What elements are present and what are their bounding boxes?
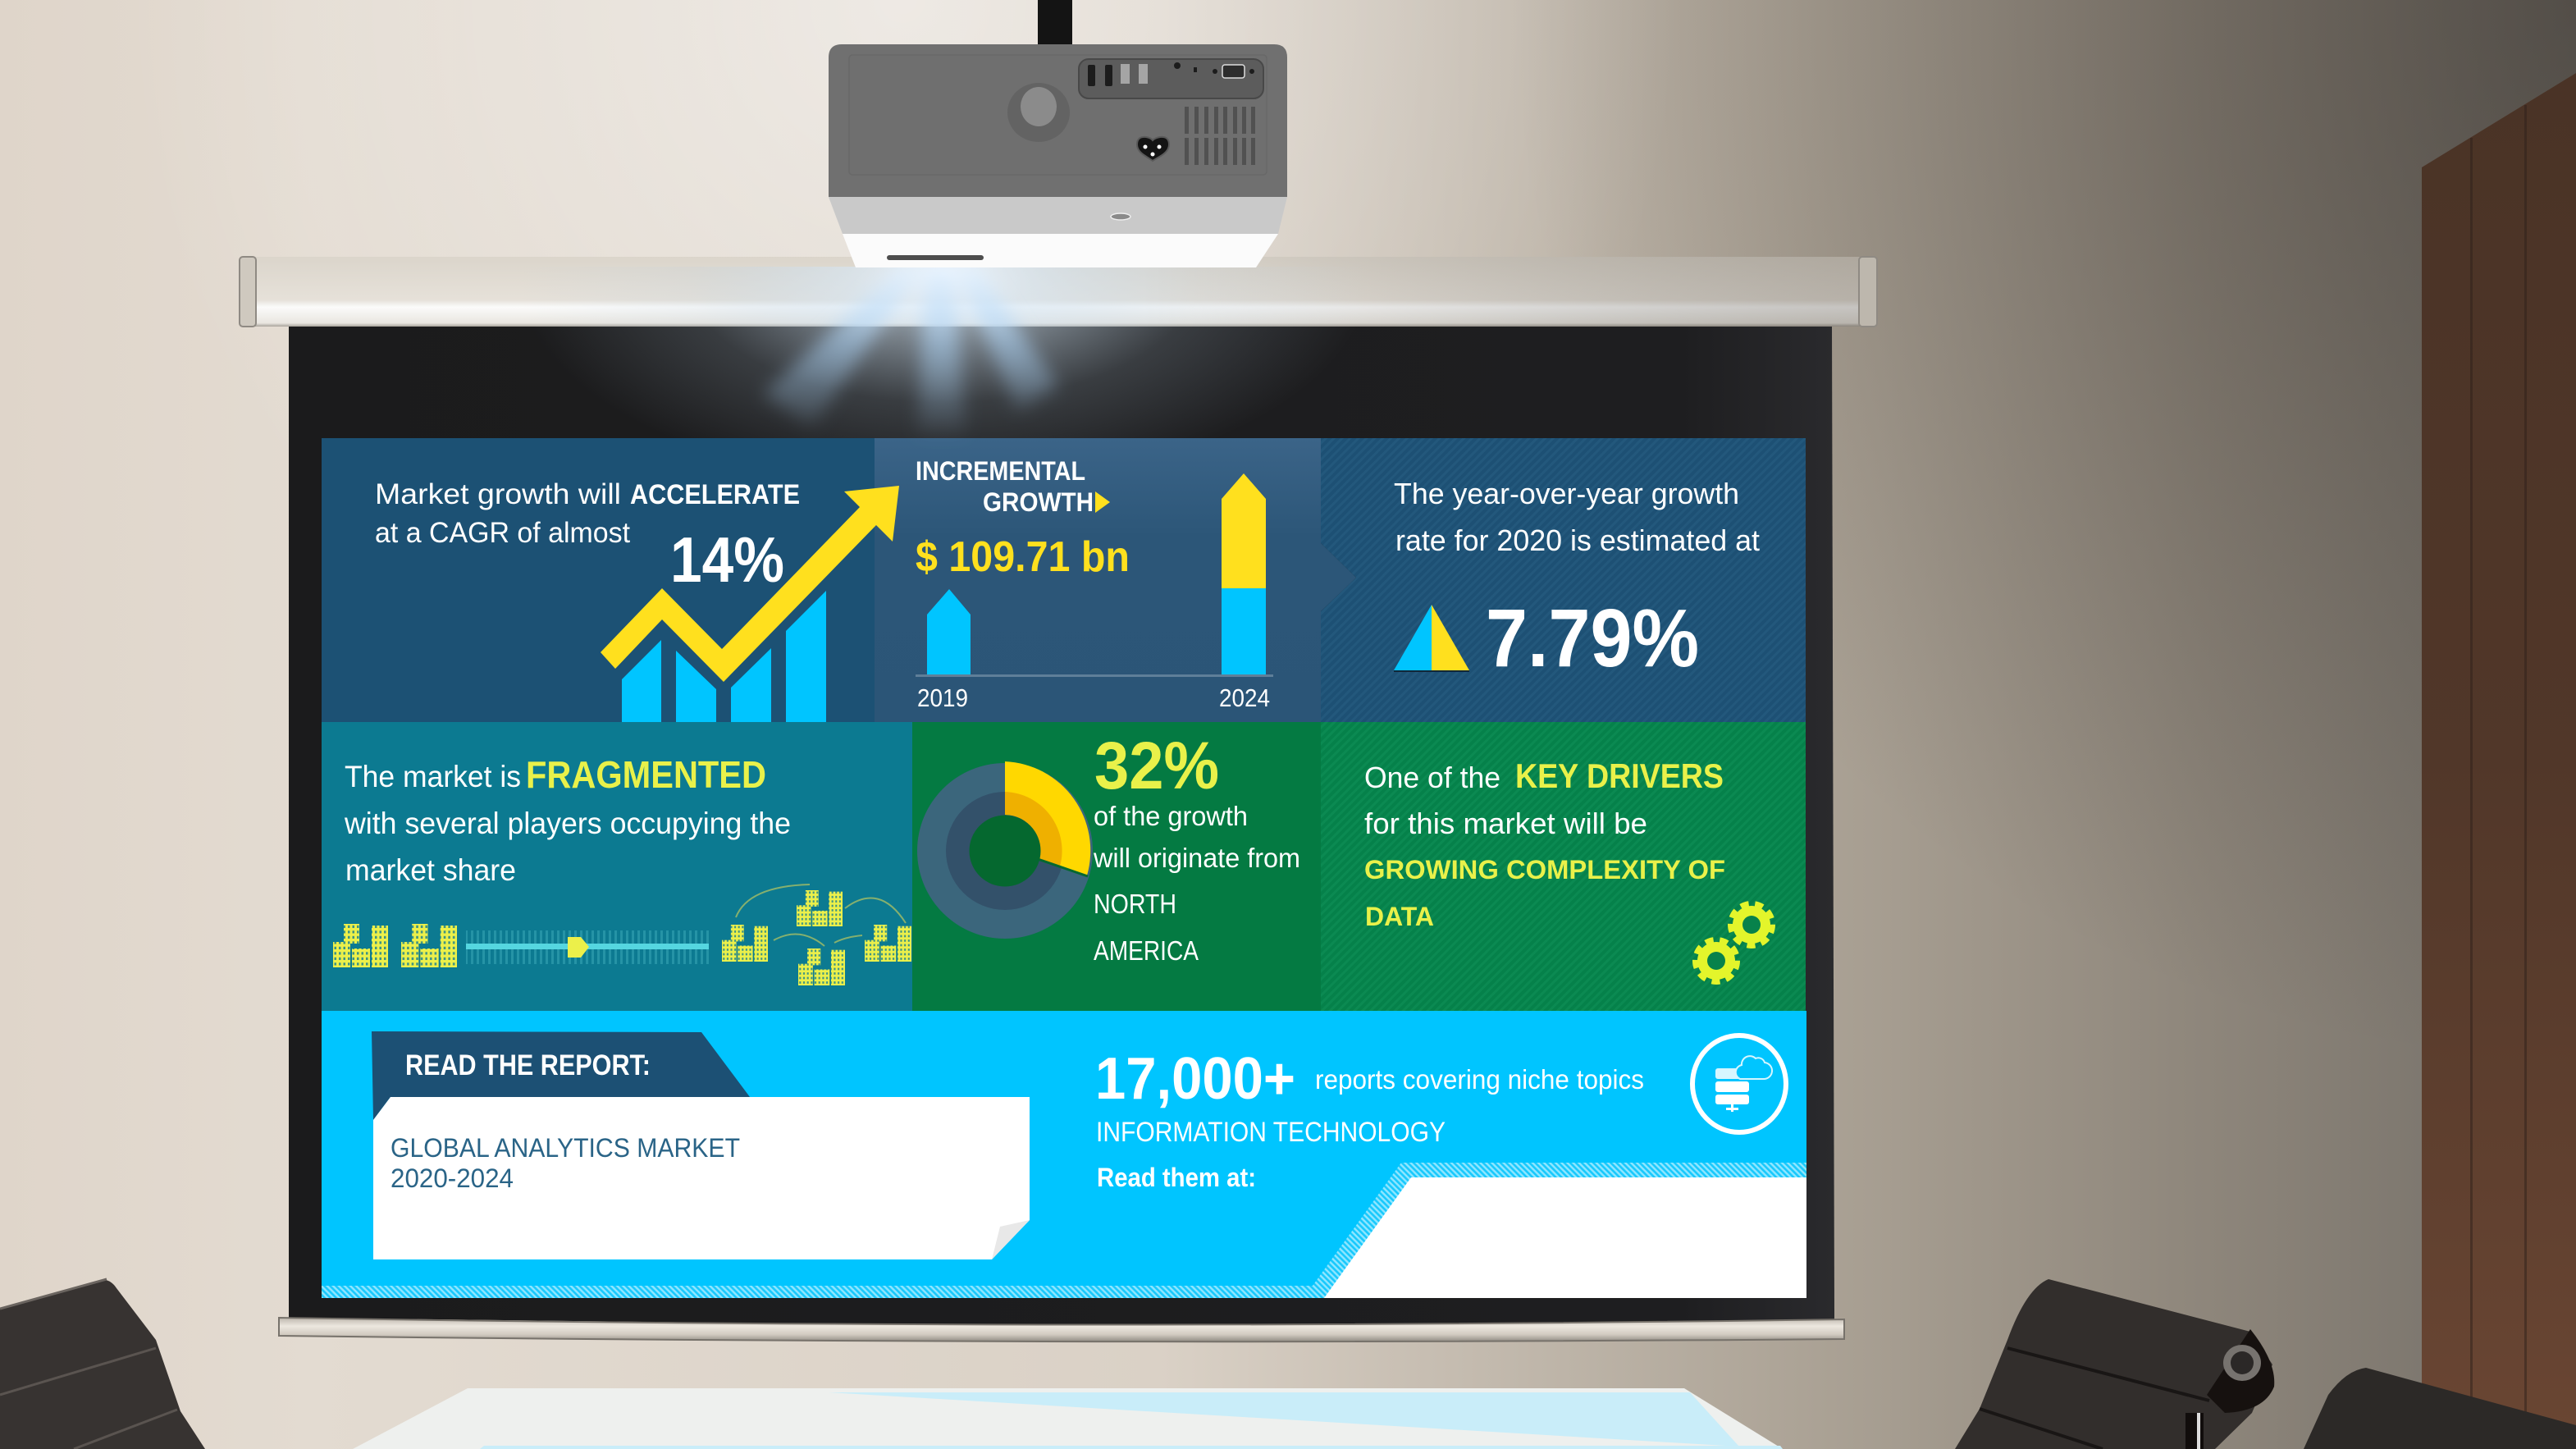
growth text: ACCELERATE bbox=[630, 479, 800, 510]
panel: market growth bbox=[322, 438, 875, 722]
AC socket bbox=[1137, 137, 1169, 161]
key drivers text: for this market will be bbox=[1364, 807, 1647, 840]
arrow: rising trend bbox=[601, 486, 899, 682]
panel: regional share bbox=[912, 722, 1321, 1011]
report title: 2020-2024 bbox=[391, 1163, 514, 1193]
chair far right bbox=[2304, 1368, 2576, 1449]
region text: AMERICA bbox=[1094, 935, 1199, 966]
panel: fragmented market bbox=[322, 722, 912, 1011]
icon: up triangle bbox=[1394, 605, 1469, 672]
growth text bbox=[375, 478, 800, 549]
value: 14%: 14% bbox=[670, 523, 784, 596]
report title bbox=[391, 1133, 740, 1193]
icon: city clusters bbox=[333, 884, 911, 985]
projection screen black border bbox=[289, 325, 1834, 1327]
meeting table bbox=[353, 1388, 1783, 1449]
infographic panel bbox=[322, 438, 1806, 1298]
icon: gears bbox=[1697, 905, 1771, 980]
heading: incremental growth: INCREMENTAL bbox=[916, 456, 1085, 486]
yoy text: The year-over-year growth bbox=[1394, 477, 1739, 510]
region text bbox=[1093, 801, 1300, 966]
wood cabinet bbox=[2422, 73, 2576, 1449]
fragmented text: with several players occupying the bbox=[344, 807, 791, 840]
key drivers text: DATA bbox=[1365, 902, 1434, 931]
heading: incremental growth: GROWTH bbox=[983, 487, 1094, 517]
region text: will originate from bbox=[1093, 843, 1300, 873]
chair right bbox=[1955, 1279, 2274, 1449]
bar: 2024 bbox=[1222, 473, 1266, 674]
key drivers text: GROWING COMPLEXITY OF bbox=[1364, 855, 1725, 884]
vents bbox=[1185, 107, 1255, 165]
panel: incremental growth bbox=[875, 438, 1356, 722]
key drivers text bbox=[1364, 756, 1725, 931]
banner: read the report bbox=[372, 1031, 750, 1120]
yoy text bbox=[1394, 477, 1760, 557]
value: $109.71 bn: $ 109.71 bn bbox=[916, 533, 1130, 581]
fragmented text: market share bbox=[345, 853, 516, 887]
fragmented text: The market is bbox=[345, 760, 521, 793]
lower shell bbox=[829, 197, 1287, 234]
donut chart: North America share bbox=[917, 761, 1093, 939]
projector light beam bbox=[517, 267, 1370, 438]
stat: 17,000+ reports bbox=[1095, 1046, 1644, 1112]
lens slot bbox=[887, 255, 984, 260]
report title: GLOBAL ANALYTICS MARKET bbox=[391, 1133, 740, 1163]
stat: 17,000+ reports: reports covering niche topics bbox=[1315, 1064, 1644, 1095]
projector bbox=[829, 0, 1287, 267]
key drivers text: One of the bbox=[1364, 761, 1500, 794]
screen top roller housing bbox=[240, 257, 1877, 327]
axis line bbox=[916, 674, 1273, 677]
front bezel bbox=[843, 234, 1278, 267]
icon: cloud server bbox=[1692, 1035, 1786, 1132]
screen bottom weight bar bbox=[279, 1318, 1844, 1342]
panel: year-over-year growth bbox=[1321, 438, 1806, 722]
text: read them at: Read them at: bbox=[1097, 1163, 1256, 1192]
banner: read the report: READ THE REPORT: bbox=[405, 1049, 651, 1081]
bar: 2019 bbox=[927, 589, 971, 674]
lens knob bbox=[1007, 83, 1070, 142]
growth text: Market growth will bbox=[375, 478, 621, 510]
panel: read the report bbox=[322, 1011, 1806, 1298]
projector body bbox=[829, 44, 1287, 197]
value: 32%: 32% bbox=[1094, 729, 1219, 803]
inset plate bbox=[849, 55, 1267, 175]
growth text: at a CAGR of almost bbox=[375, 517, 630, 549]
stat: 17,000+ reports: 17,000+ bbox=[1095, 1046, 1295, 1112]
key drivers text: KEY DRIVERS bbox=[1515, 756, 1724, 795]
bar chart: growth bars bbox=[622, 591, 826, 722]
text: information technology: INFORMATION TECHNOLOGY bbox=[1096, 1117, 1446, 1148]
panel: key drivers bbox=[1321, 722, 1806, 1011]
yoy text: rate for 2020 is estimated at bbox=[1395, 523, 1760, 557]
arrow: consolidation line bbox=[466, 930, 709, 964]
screw bbox=[1111, 213, 1130, 220]
ceiling mount bbox=[1038, 0, 1072, 46]
fragmented text: FRAGMENTED bbox=[526, 753, 766, 796]
region text: NORTH bbox=[1094, 889, 1176, 919]
hatched border bbox=[322, 1163, 1806, 1298]
fragmented text bbox=[344, 753, 791, 887]
heading: incremental growth bbox=[916, 456, 1110, 517]
report card bbox=[373, 1097, 1030, 1259]
label: 2019: 2019 bbox=[917, 683, 968, 712]
ports panel bbox=[1079, 59, 1263, 98]
label: 2024: 2024 bbox=[1219, 683, 1270, 712]
chair left bbox=[0, 1279, 205, 1449]
value: 7.79%: 7.79% bbox=[1486, 592, 1699, 684]
link box bbox=[1324, 1177, 1806, 1298]
region text: of the growth bbox=[1094, 801, 1248, 831]
